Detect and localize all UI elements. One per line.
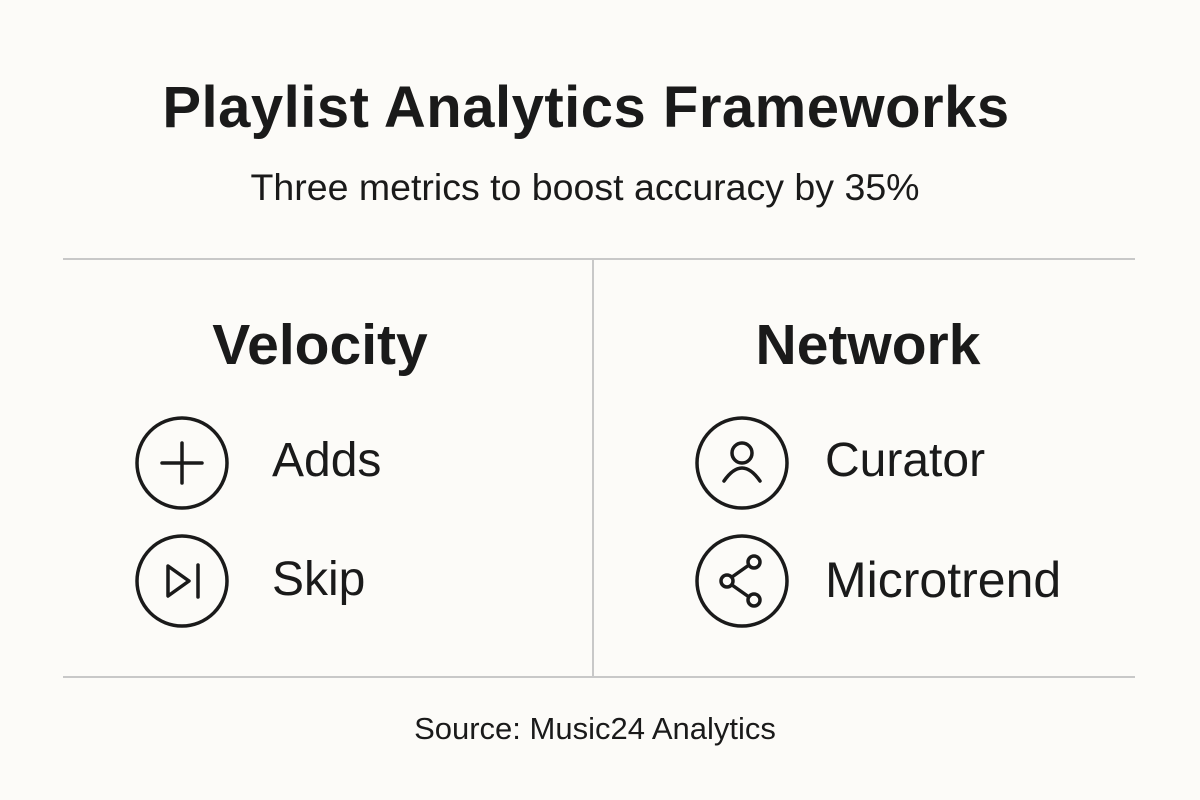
label: Adds: Adds (272, 434, 381, 487)
panel: velocity (135, 313, 428, 628)
icon: person (695, 416, 789, 510)
label: Curator: Curator (825, 434, 985, 487)
heading: Velocity: Velocity (212, 313, 428, 377)
icon: share (695, 534, 789, 628)
label: Microtrend: Microtrend (825, 552, 1061, 608)
heading: Network: Network (756, 313, 980, 377)
source: Source: Music24 Analytics (414, 711, 776, 746)
title: Playlist Analytics Frameworks (162, 75, 1010, 140)
icon: skip (135, 534, 229, 628)
icon: plus (135, 416, 229, 510)
label: Skip: Skip (272, 553, 365, 606)
panel: network (695, 313, 1061, 628)
subtitle: Three metrics to boost accuracy by 35% (250, 166, 920, 208)
